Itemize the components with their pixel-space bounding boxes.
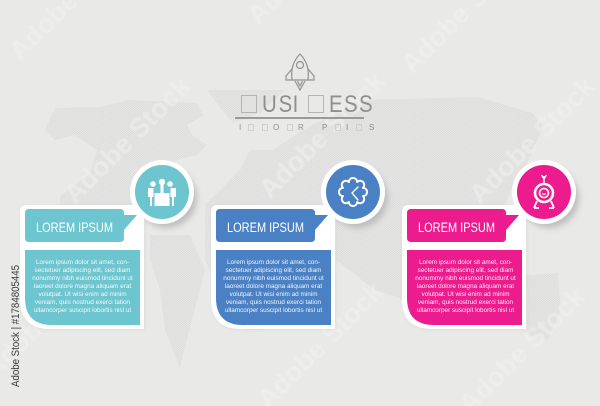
body panel — [25, 250, 140, 325]
title: business: USI — [262, 90, 298, 117]
card shadow and white frame — [402, 160, 579, 330]
body text: laoreet dolore magna aliquam erat — [225, 283, 322, 290]
body text: ullamcorper suscipit lobortis nisl ut — [225, 307, 322, 314]
header ribbon — [25, 209, 137, 242]
body text: ullamcorper suscipit lobortis nisl ut — [417, 307, 514, 314]
body text: laoreet dolore magna aliquam erat — [417, 283, 514, 290]
title: business: ESS — [329, 90, 373, 117]
icon: rocket — [286, 54, 314, 90]
body text: laoreet dolore magna aliquam erat — [34, 283, 131, 290]
body panel — [216, 250, 331, 325]
body text — [415, 259, 516, 314]
subtitle: infographics — [239, 123, 374, 132]
body text: ullamcorper suscipit lobortis nisl ut — [34, 307, 131, 314]
body text: Lorem ipsum dolor sit amet, con- — [227, 259, 320, 266]
body text: nonummy nibh euismod tincidunt ut — [223, 275, 324, 282]
heading: LOREM IPSUM — [227, 220, 304, 235]
body text: sectetuer adipiscing elit, sed diam — [418, 267, 513, 274]
body text: nonummy nibh euismod tincidunt ut — [32, 275, 133, 282]
header ribbon — [407, 209, 519, 242]
card shadow and white frame — [211, 160, 388, 330]
body text: Lorem ipsum dolor sit amet, con- — [36, 259, 129, 266]
subtitle: infographics: O — [273, 123, 279, 132]
body text: volutpat. Ut wisi enim ad minim — [421, 291, 510, 298]
dotted world map — [45, 90, 561, 367]
subtitle: infographics: I — [346, 123, 348, 132]
body text — [32, 259, 133, 314]
icon circle — [517, 165, 571, 219]
watermark: Adobe Stock repeated: Adobe Stock — [58, 71, 197, 209]
title: business — [242, 90, 373, 117]
subtitle: infographics: R — [298, 123, 304, 132]
panel: blue card — [211, 160, 388, 330]
icon: gear clock — [339, 178, 367, 206]
image id vertical text: Adobe Stock | #1784805445 — [10, 265, 22, 387]
watermark: Adobe Stock repeated: Adobe Stock — [463, 71, 600, 209]
heading: LOREM IPSUM — [36, 220, 113, 235]
body text: volutpat. Ut wisi enim ad minim — [229, 291, 318, 298]
subtitle: infographics: P — [322, 123, 327, 132]
body text: Lorem ipsum dolor sit amet, con- — [419, 259, 512, 266]
body text — [223, 259, 324, 314]
icon: people — [148, 179, 176, 206]
subtitle: infographics: S — [369, 123, 374, 132]
body text: veniam, quis nostrud exerci tation — [418, 299, 514, 306]
icon circle — [326, 165, 380, 219]
body text: veniam, quis nostrud exerci tation — [35, 299, 131, 306]
body text: sectetuer adipiscing elit, sed diam — [226, 267, 321, 274]
subtitle: infographics: I — [239, 123, 241, 132]
panel: pink card — [402, 160, 579, 330]
body text: sectetuer adipiscing elit, sed diam — [35, 267, 130, 274]
watermark: Adobe Stock repeated: Adobe Stock — [253, 66, 392, 204]
heading: LOREM IPSUM — [418, 220, 495, 235]
card shadow and white frame — [20, 160, 197, 330]
icon circle — [135, 165, 189, 219]
title underline — [235, 117, 364, 119]
icon: target — [534, 175, 554, 208]
body text: nonummy nibh euismod tincidunt ut — [415, 275, 516, 282]
body text: veniam, quis nostrud exerci tation — [226, 299, 322, 306]
body text: volutpat. Ut wisi enim ad minim — [38, 291, 127, 298]
header ribbon — [216, 209, 328, 242]
panel: teal card — [20, 160, 197, 330]
body panel — [407, 250, 522, 325]
